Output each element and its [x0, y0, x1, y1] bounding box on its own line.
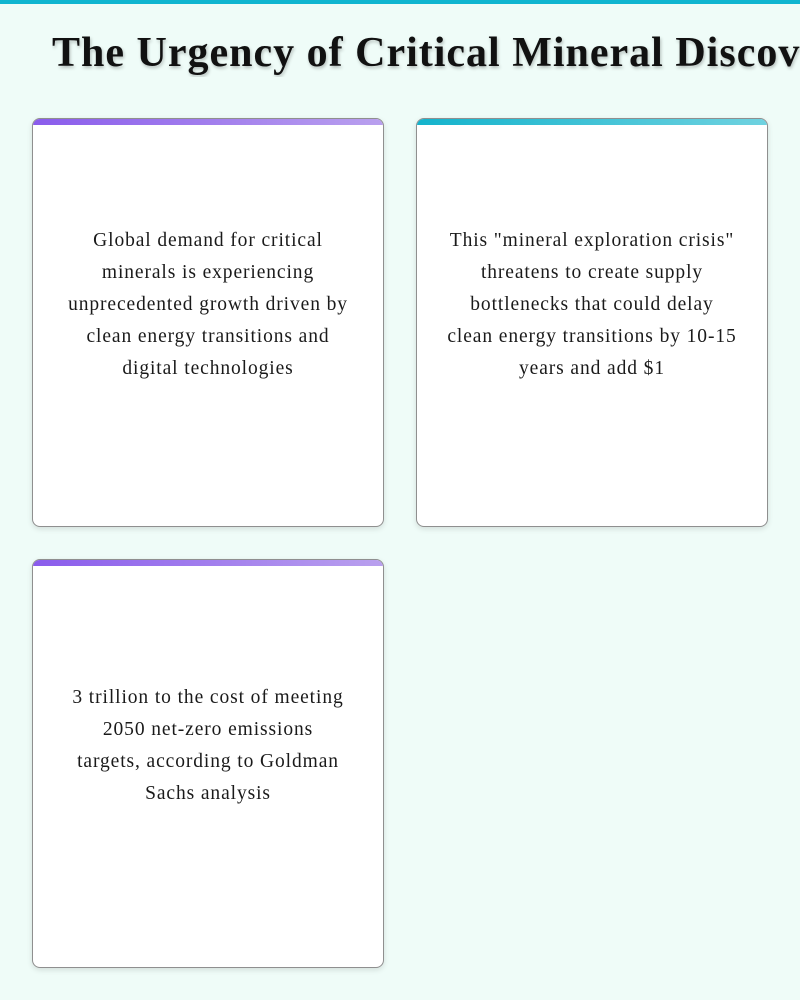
card accent strip teal [417, 119, 767, 125]
card text: 2050 net-zero emissions [103, 718, 313, 740]
card: global demand [32, 118, 384, 527]
card: cost [32, 559, 384, 968]
card text: threatens to create supply [481, 262, 703, 282]
card text: bottlenecks that could delay [470, 294, 714, 314]
card text: 3 trillion to the cost of meeting [72, 686, 344, 708]
top accent bar [0, 0, 800, 4]
card text [447, 230, 737, 378]
card text: clean energy transitions and [86, 326, 330, 346]
card accent strip purple [33, 119, 383, 125]
card text: targets, according to Goldman [77, 750, 339, 772]
card: exploration crisis [416, 118, 768, 527]
card text: unprecedented growth driven by [68, 294, 348, 314]
card text: Sachs analysis [145, 782, 271, 804]
card text: digital technologies [122, 358, 294, 378]
card text: This "mineral exploration crisis" [450, 230, 734, 250]
card text: Global demand for critical [93, 230, 323, 250]
card text [68, 230, 348, 378]
card text: minerals is experiencing [102, 262, 314, 282]
card accent strip purple [33, 560, 383, 566]
card text [72, 686, 344, 804]
card text: clean energy transitions by 10-15 [447, 326, 737, 346]
card text: years and add $1 [519, 358, 665, 378]
